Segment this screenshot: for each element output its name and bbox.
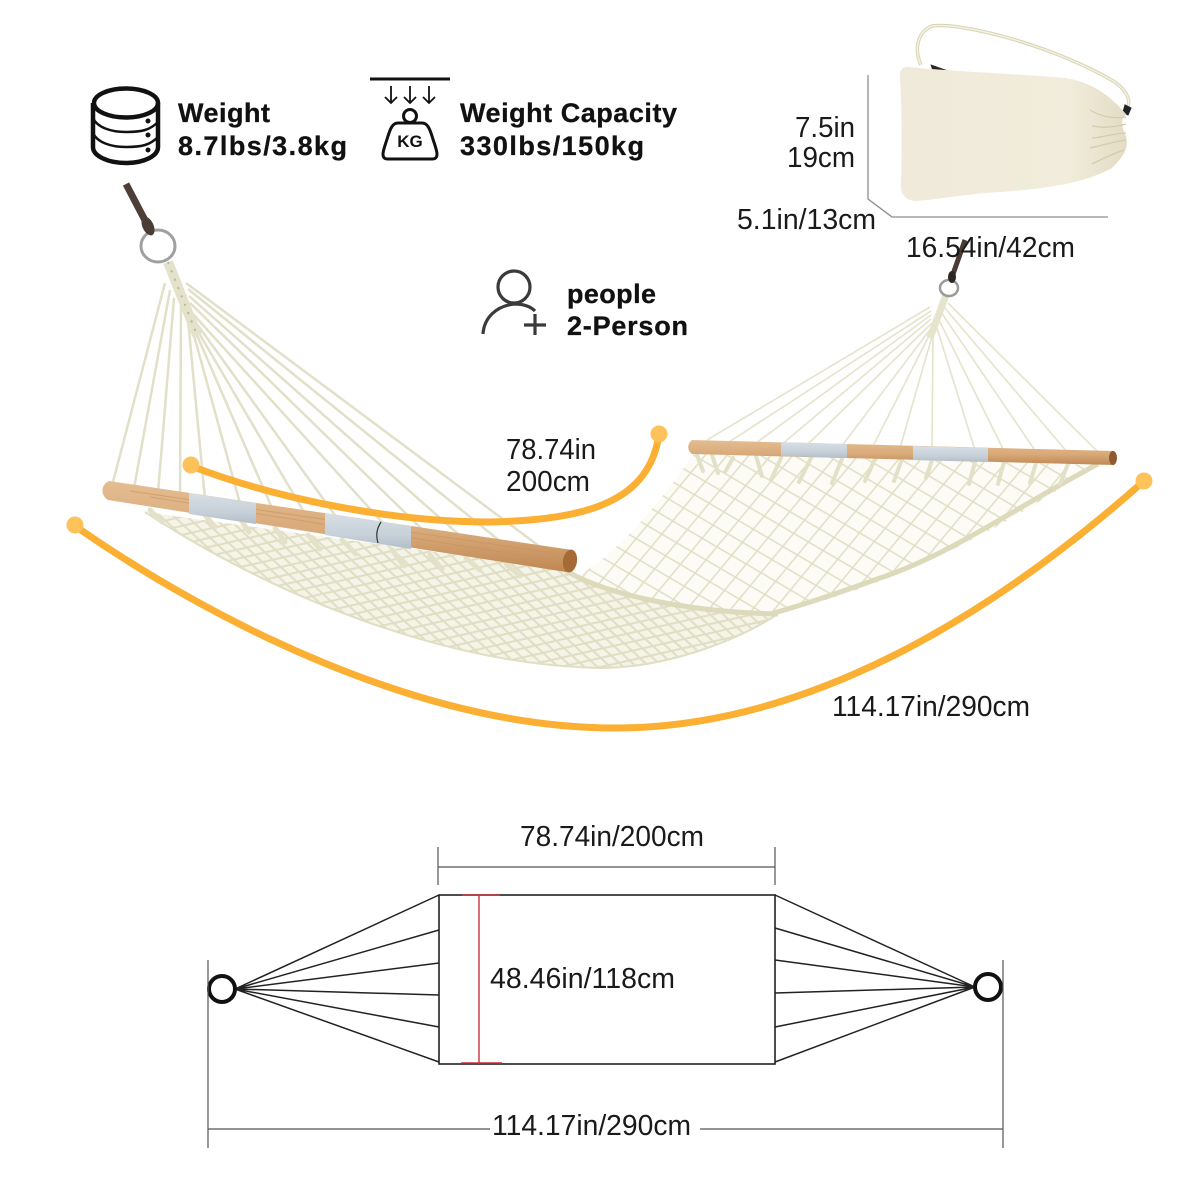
text: bed length callout — [506, 434, 596, 498]
pouch dimension guide — [868, 75, 1108, 217]
hammock illustration — [102, 184, 1117, 668]
text: bed length callout: 78.74in — [506, 434, 596, 466]
text: weight — [178, 98, 347, 161]
text: people: 2-Person — [567, 311, 688, 341]
text: people: people — [567, 279, 656, 309]
text: pouch dimensions: 19cm — [787, 142, 855, 174]
arrow: short width curve — [182, 426, 668, 522]
right ropes — [707, 303, 1100, 454]
schematic labels — [490, 821, 704, 1142]
front net — [145, 510, 778, 668]
text: weight capacity: Weight Capacity — [460, 98, 677, 128]
left ropes — [113, 283, 547, 552]
text: bed length callout: 200cm — [506, 466, 590, 498]
back net — [575, 452, 1098, 615]
text: pouch dimensions: 5.1in/13cm — [737, 204, 876, 236]
schematic bed — [439, 895, 775, 1064]
text: pouch dimensions — [737, 112, 876, 236]
left gather and ring — [126, 184, 197, 335]
icon: weight capacity — [370, 79, 450, 159]
pouch: carry bag — [900, 26, 1131, 201]
icon: person plus — [483, 271, 546, 335]
text: 16.54in pouch length: 16.54in/42cm — [906, 232, 1075, 264]
text: weight capacity: 330lbs/150kg — [460, 131, 644, 161]
text: weight: Weight — [178, 98, 270, 128]
schematic strings — [235, 895, 975, 1062]
text: total length callout: 114.17in/290cm — [832, 691, 1030, 723]
text: weight: 8.7lbs/3.8kg — [178, 131, 347, 161]
width measure in red — [461, 895, 502, 1064]
left wooden bar — [102, 481, 579, 573]
schematic labels: 48.46in/118cm — [490, 963, 675, 995]
measure lines — [208, 847, 1003, 1148]
text: pouch dimensions: 7.5in — [795, 112, 855, 144]
schematic labels: 78.74in/200cm — [520, 821, 704, 853]
text: people — [567, 279, 688, 341]
text: weight capacity — [460, 98, 677, 161]
right wooden bar — [688, 440, 1117, 465]
right gather and ring — [930, 240, 965, 338]
schematic labels: 114.17in/290cm — [492, 1110, 691, 1142]
diagram: top-view schematic — [208, 821, 1003, 1148]
arrow: long length curve — [66, 472, 1152, 728]
schematic rings — [209, 974, 1001, 1002]
icon: weight capacity: KG — [397, 132, 423, 151]
icon: database weight — [93, 88, 158, 163]
